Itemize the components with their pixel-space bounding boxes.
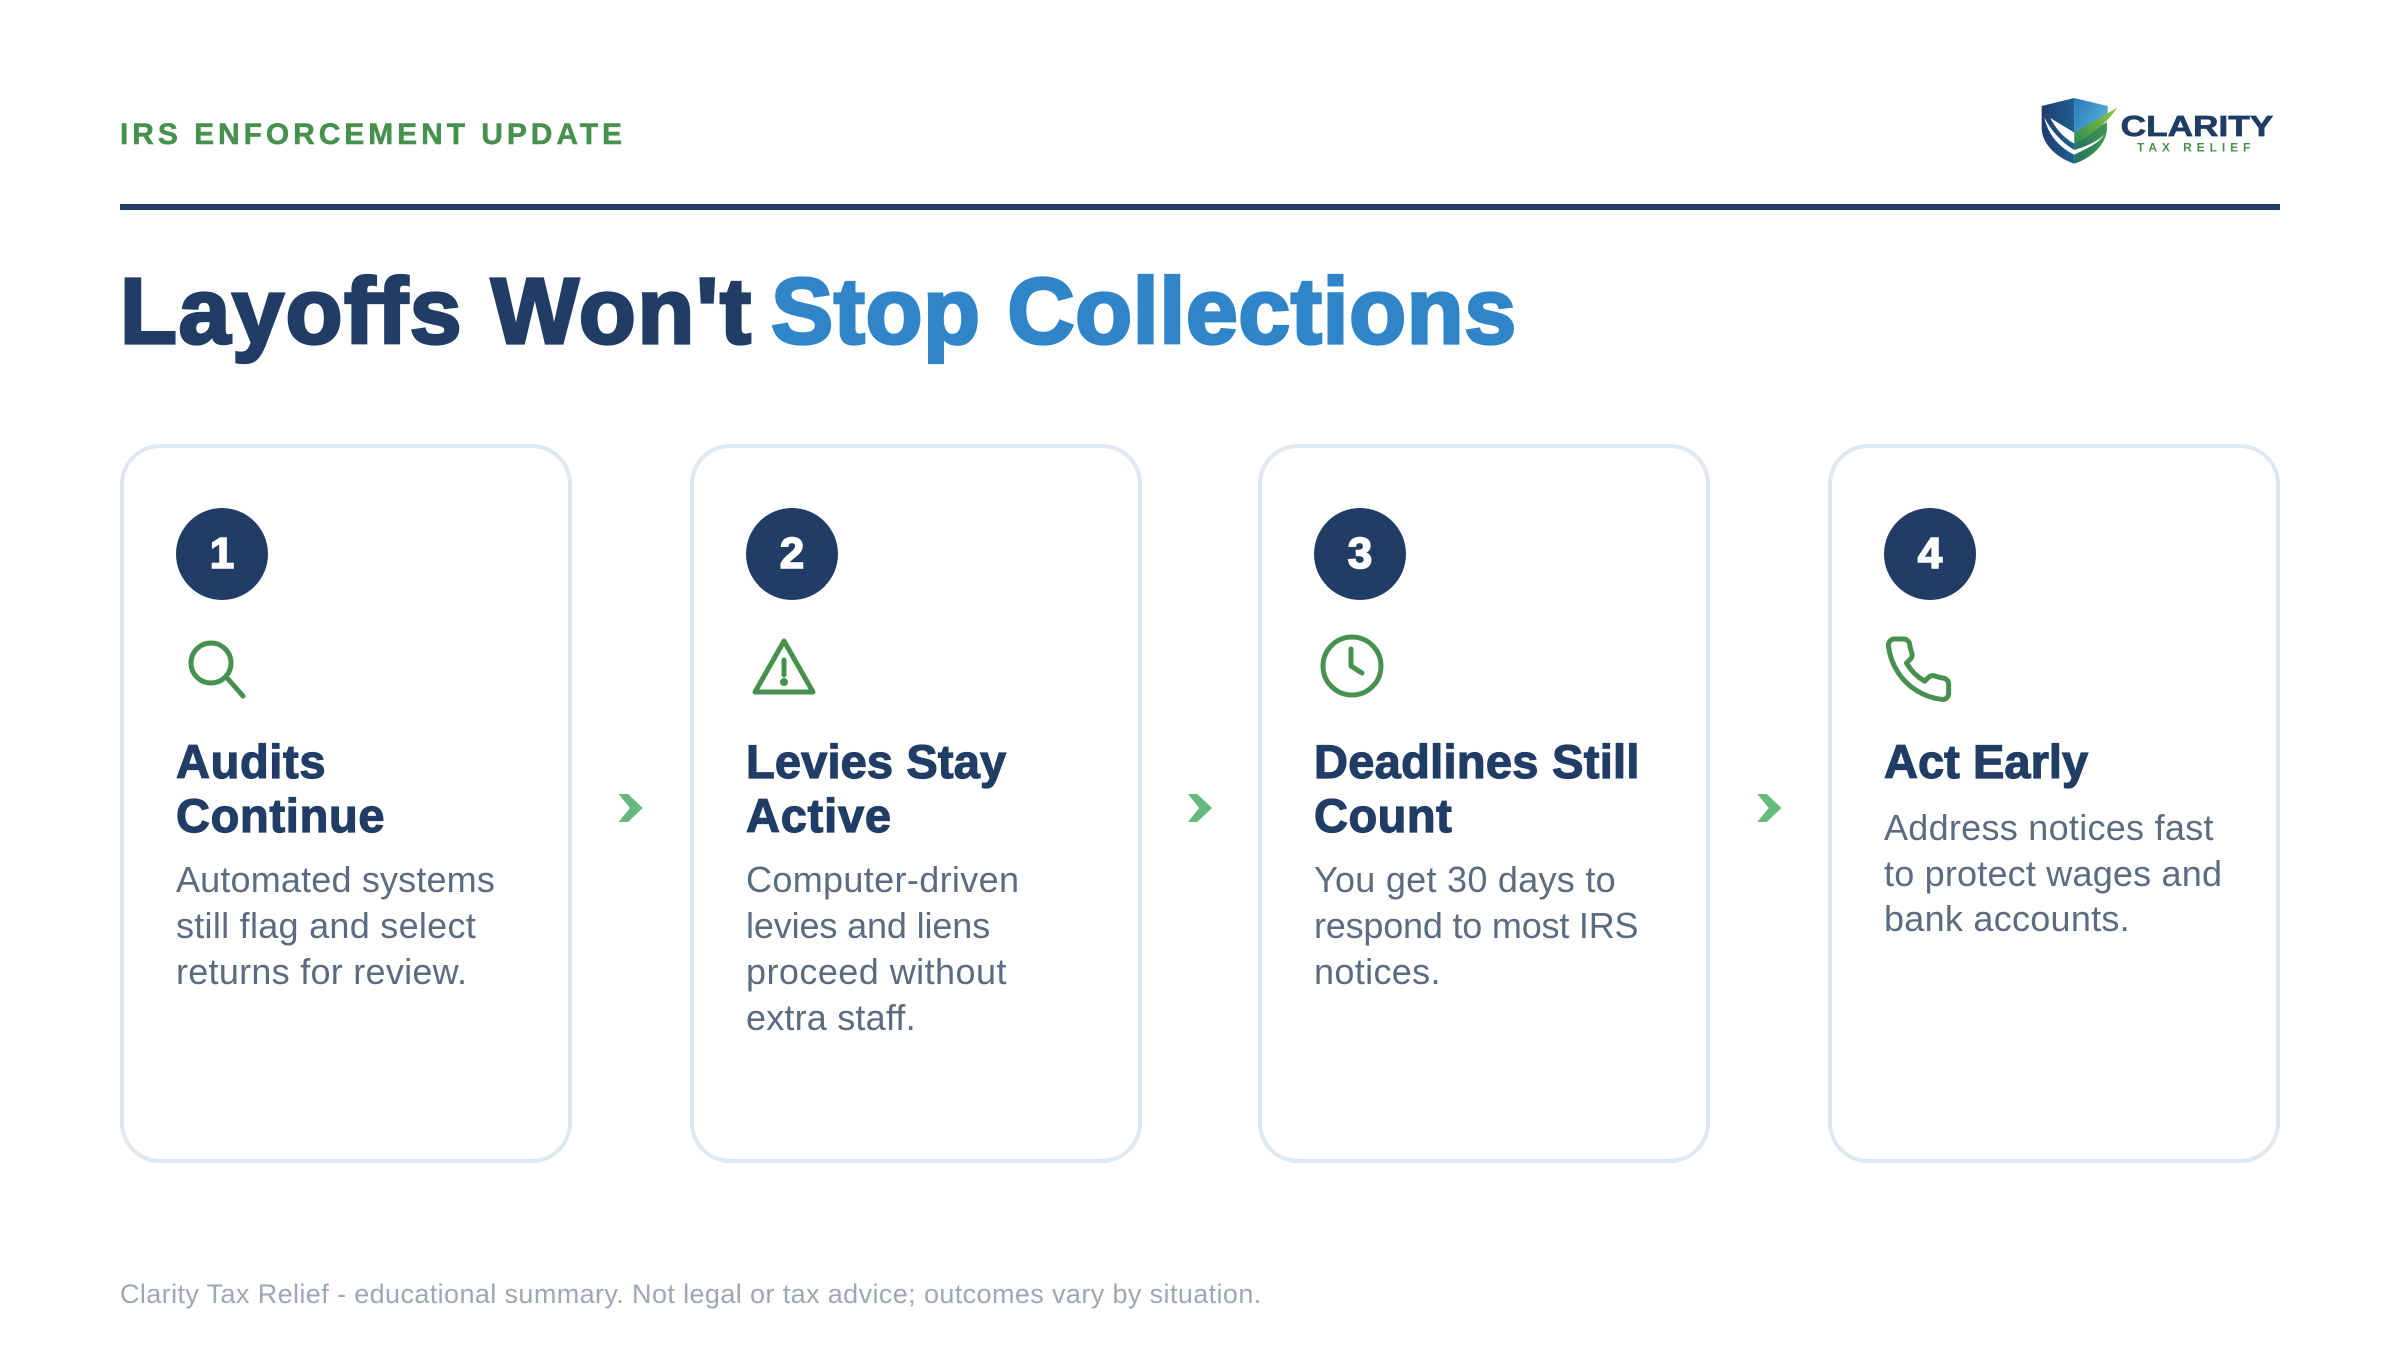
- card body: extra staff.: [746, 997, 916, 1038]
- card body: notices.: [1314, 951, 1441, 992]
- panel: step 4 act early: [1828, 444, 2280, 1163]
- panel: step 3 deadlines: [1258, 444, 1710, 1163]
- step number 3: 3: [1348, 529, 1372, 578]
- icon: clock: [1320, 634, 1384, 698]
- card heading: [176, 735, 385, 842]
- card heading: Count: [1314, 789, 1452, 842]
- logo: TAX RELIEF: [2137, 141, 2250, 155]
- step number 1: 1: [210, 529, 234, 578]
- title: Layoffs Won't Stop Collections: [120, 259, 1517, 363]
- card heading: Deadlines Still: [1314, 735, 1640, 788]
- icon: phone: [1886, 636, 1952, 702]
- card body: respond to most IRS: [1314, 905, 1638, 946]
- card heading: Act Early: [1884, 735, 2088, 788]
- card body: levies and liens: [746, 905, 990, 946]
- card heading: Continue: [176, 789, 385, 842]
- panel: step 2 levies: [690, 444, 1142, 1163]
- card body: returns for review.: [176, 951, 467, 992]
- card body: [1884, 807, 2222, 939]
- card body: You get 30 days to: [1314, 859, 1616, 900]
- card body: bank accounts.: [1884, 898, 2130, 939]
- card body: still flag and select: [176, 905, 476, 946]
- logo: CLARITY: [2121, 111, 2273, 143]
- step number 2: [746, 508, 838, 600]
- step number 1: [176, 508, 268, 600]
- icon: warning triangle: [752, 638, 816, 694]
- icon: magnifier: [188, 640, 246, 698]
- step number 3: [1314, 508, 1406, 600]
- card body: [1314, 859, 1638, 992]
- header rule: [120, 204, 2280, 210]
- card heading: Levies Stay: [746, 735, 1006, 788]
- card body: [176, 859, 495, 992]
- card heading: Audits: [176, 735, 326, 788]
- card heading: [746, 735, 1007, 842]
- card body: [746, 859, 1019, 1038]
- panel: step 1 audits: [120, 444, 572, 1163]
- step number 4: 4: [1918, 529, 1942, 578]
- footer disclaimer: Clarity Tax Relief - educational summary. Not legal or tax advice; outcomes vary by situation.: [120, 1279, 1262, 1309]
- card body: proceed without: [746, 951, 1007, 992]
- step number 4: [1884, 508, 1976, 600]
- logo: [2042, 98, 2274, 164]
- card body: Automated systems: [176, 859, 495, 900]
- step number 2: 2: [780, 529, 804, 578]
- card heading: Active: [746, 789, 892, 842]
- card heading: [1314, 735, 1640, 842]
- card body: Address notices fast: [1884, 807, 2214, 848]
- card body: Computer-driven: [746, 859, 1019, 900]
- card body: to protect wages and: [1884, 852, 2222, 894]
- eyebrow heading: IRS ENFORCEMENT UPDATE: [120, 118, 626, 151]
